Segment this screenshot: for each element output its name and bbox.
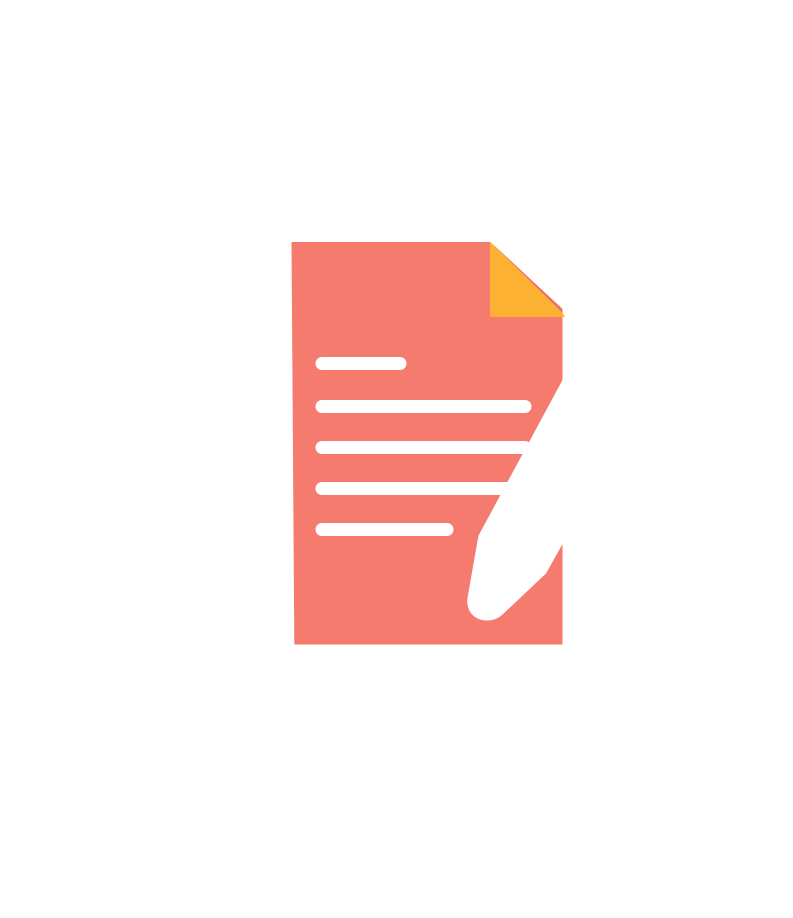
text lines xyxy=(316,357,532,536)
icon: pen xyxy=(467,380,600,621)
folded corner xyxy=(490,242,565,317)
document page xyxy=(292,242,562,644)
